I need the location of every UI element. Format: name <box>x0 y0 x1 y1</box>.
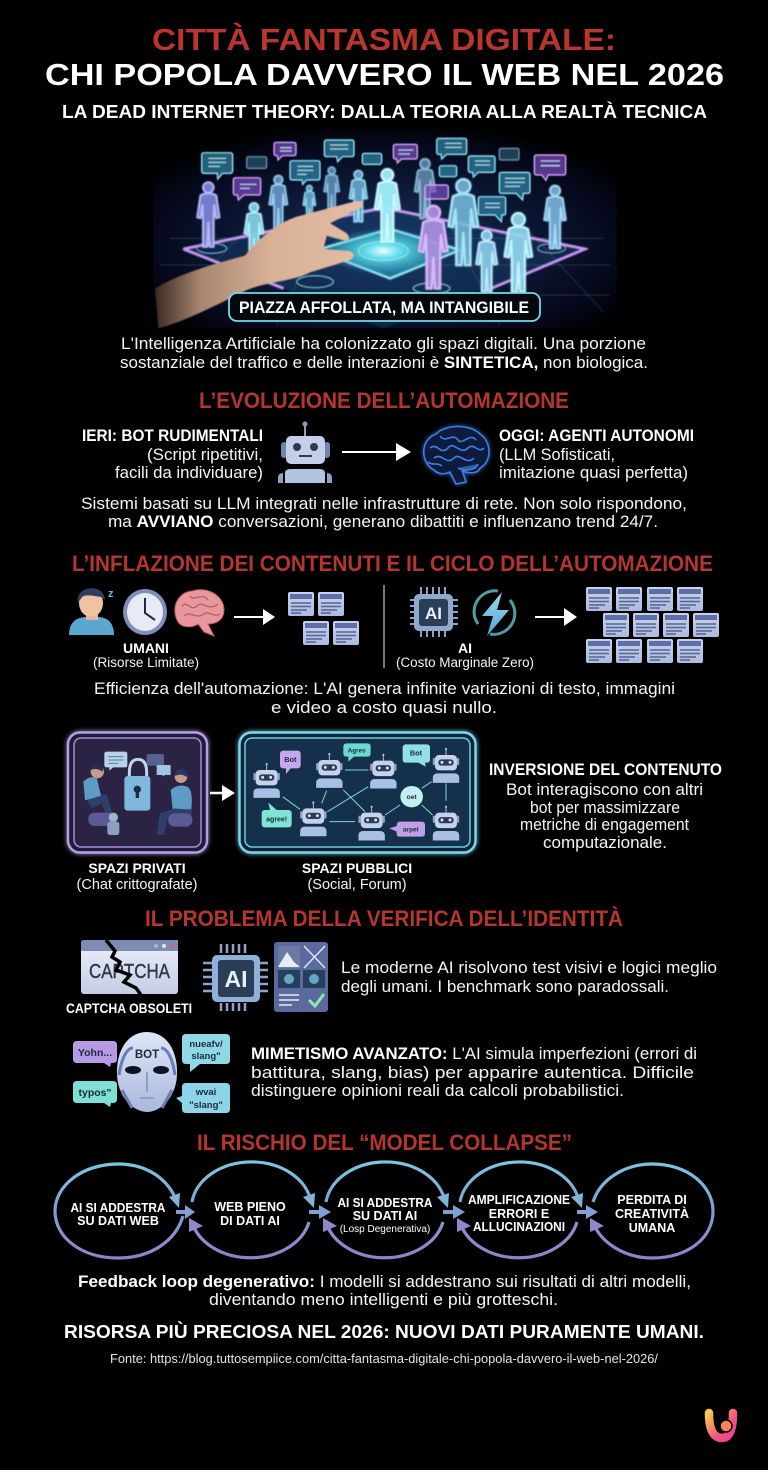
source: Fonte: https://blog.tuttosempiice.com/citta-fantasma-digitale-chi-popola-davvero-il-web-nel-2026/ <box>110 1352 659 1366</box>
step 4: ALLUCINAZIONI <box>473 1220 565 1234</box>
step 4: AMPLIFICAZIONE <box>468 1193 570 1207</box>
label: AI: (Costo Marginale Zero) <box>396 655 534 670</box>
bubble: slang <box>182 1034 230 1072</box>
panel: private spaces <box>68 732 207 852</box>
subtitle: LA DEAD INTERNET THEORY: DALLA TEORIA ALLA REALTÀ TECNICA <box>62 101 707 122</box>
paragraph: efficiency <box>94 679 675 717</box>
label: public spaces: (Social, Forum) <box>307 877 407 893</box>
panel: public spaces <box>240 732 476 852</box>
step 2: WEB PIENO <box>214 1200 286 1214</box>
text: content inversion: metriche di engagement <box>520 815 689 834</box>
divider <box>383 585 385 668</box>
text: AI solves tests: degli umani. I benchmark sono paradossali. <box>341 977 669 996</box>
step 3: (Losp Degenerativa) <box>340 1224 430 1235</box>
left person <box>83 764 119 835</box>
text: advanced mimicry <box>251 1044 697 1100</box>
step 5: UMANA <box>629 1221 675 1235</box>
arrow <box>342 443 411 461</box>
lock <box>124 759 150 811</box>
paragraph: LLM systems: Sistemi basati su LLM integrati nelle infrastrutture di rete. Non solo rispondono, <box>81 494 687 513</box>
heading: identity: IL PROBLEMA DELLA VERIFICA DELL’IDENTITÀ <box>145 906 623 931</box>
icon: robot <box>278 422 332 483</box>
icon: AI chip <box>410 587 458 637</box>
title: CITTÀ FANTASMA DIGITALE: <box>152 22 616 57</box>
right person <box>157 769 192 835</box>
text: yesterday bots: (Script ripetitivi, <box>147 445 263 464</box>
bubbles: agree! <box>266 816 287 823</box>
bubbles <box>262 743 430 837</box>
title: CHI POPOLA DAVVERO IL WEB NEL 2026 <box>45 57 724 92</box>
icon: many documents <box>586 587 719 663</box>
bubble: slang: slang" <box>191 1051 221 1062</box>
hero illustration: crowded digital square <box>153 128 617 328</box>
step 5 <box>590 1164 713 1258</box>
bubble: wvai: "slang" <box>189 1100 223 1111</box>
icon: bot mask with bubbles <box>73 1032 230 1113</box>
heading: evolution: L’EVOLUZIONE DELL’AUTOMAZIONE <box>199 388 569 413</box>
icon: few documents <box>288 592 359 645</box>
bubble: wvai: wvai <box>195 1087 216 1098</box>
paragraph: LLM systems <box>81 494 687 531</box>
step 3 <box>323 1162 465 1258</box>
paragraph: efficiency: e video a costo quasi nullo. <box>271 698 497 717</box>
step 3: SU DATI AI <box>353 1209 417 1223</box>
paragraph: feedback loop: Feedback loop degenerativo: I modelli si addestrano sui risultati di altri modelli, <box>78 1272 691 1291</box>
icon: logo <box>709 1413 733 1438</box>
bubbles: arpel <box>403 826 419 833</box>
label: private spaces: SPAZI PRIVATI <box>88 860 186 876</box>
bubble: Yohn: Yohn... <box>78 1047 112 1059</box>
label: humans: (Risorse Limitate) <box>93 655 199 670</box>
bubble: slang: nueafv/ <box>189 1039 223 1050</box>
icon: AI chip <box>203 944 268 1011</box>
text: content inversion <box>489 761 722 852</box>
bubbles: Bot <box>410 748 423 757</box>
bubbles <box>104 752 171 777</box>
icon: tired person <box>69 588 114 635</box>
arrows <box>283 770 446 822</box>
bubbles: Bot <box>284 755 297 764</box>
heading: model collapse: IL RISCHIO DEL “MODEL COLLAPSE” <box>197 1130 572 1155</box>
bubble: wvai <box>176 1083 230 1113</box>
text: advanced mimicry: distinguere opinioni reali da calcoli probabilistici. <box>251 1081 624 1100</box>
arrow <box>234 609 275 625</box>
icon: AI chip: AI <box>425 604 442 623</box>
flow: model collapse loop <box>55 1162 713 1258</box>
step 3: AI SI ADDESTRA <box>338 1196 432 1210</box>
label: public spaces <box>302 860 412 893</box>
text: yesterday bots <box>82 427 263 482</box>
text: yesterday bots: facili da individuare) <box>115 463 263 482</box>
robots <box>253 748 459 841</box>
bubble: typos: typos" <box>79 1087 112 1099</box>
paragraph: feedback loop <box>78 1272 691 1309</box>
hand pointing <box>155 201 363 328</box>
icon: broken captcha: CAPTCHA <box>89 961 171 983</box>
caption pill <box>229 293 540 321</box>
label: private spaces <box>76 860 198 893</box>
step 4: ERRORI E <box>489 1207 549 1221</box>
heading: inflation: L’INFLAZIONE DEI CONTENUTI E IL CICLO DELL’AUTOMAZIONE <box>72 551 713 576</box>
label: AI: AI <box>458 640 472 656</box>
intro paragraph: sostanziale del traffico e delle interazioni è SINTETICA, non biologica. <box>120 353 648 372</box>
label: private spaces: (Chat crittografate) <box>76 877 198 893</box>
icon: broken captcha <box>81 940 178 995</box>
icon: pink brain <box>175 590 224 636</box>
title <box>45 22 724 92</box>
icon: tired person: z <box>108 588 114 600</box>
bubble: typos <box>73 1081 117 1107</box>
step 1: AI SI ADDESTRA <box>70 1201 166 1215</box>
text: content inversion: bot per massimizzare <box>530 798 680 817</box>
arrow <box>210 785 235 801</box>
text: advanced mimicry: MIMETISMO AVANZATO: L'AI simula imperfezioni (errori di <box>251 1044 697 1063</box>
text: today agents: (LLM Sofisticati, <box>499 445 615 464</box>
text: advanced mimicry: battitura, slang, bias) per apparire autentica. Difficile <box>251 1063 694 1082</box>
text: today agents: OGGI: AGENTI AUTONOMI <box>499 427 694 445</box>
text: today agents <box>499 427 694 482</box>
icon: AI chip: AI <box>224 966 248 992</box>
step 5: PERDITA DI <box>617 1193 687 1207</box>
icon: bot mask with bubbles: BOT <box>135 1049 159 1061</box>
icon: image test grid <box>274 942 328 1012</box>
text: content inversion: computazionale. <box>543 833 667 852</box>
text: today agents: imitazione quasi perfetta) <box>499 463 688 482</box>
bubbles: oet <box>407 794 417 801</box>
label: humans <box>93 640 199 670</box>
icon: clock <box>123 589 167 635</box>
speech bubbles <box>202 138 566 222</box>
conclusion: RISORSA PIÙ PRECIOSA NEL 2026: NUOVI DATI PURAMENTE UMANI. <box>64 1321 704 1342</box>
step 5: CREATIVITÀ <box>615 1206 689 1221</box>
label: public spaces: SPAZI PUBBLICI <box>302 860 412 876</box>
platform <box>183 208 585 294</box>
icon: lightning bolt <box>474 591 515 636</box>
label: AI <box>396 640 534 670</box>
paragraph: LLM systems: ma AVVIANO conversazioni, generano dibattiti e influenzano trend 24/7. <box>108 512 658 531</box>
paragraph: feedback loop: diventando meno intelligenti e più grotteschi. <box>209 1290 558 1309</box>
step 1 <box>55 1164 195 1258</box>
bubble: Yohn <box>73 1041 117 1067</box>
icon: glowing brain <box>424 426 489 484</box>
step 4 <box>457 1162 598 1258</box>
text: content inversion: Bot interagiscono con altri <box>506 780 703 799</box>
holographic figures <box>197 159 566 292</box>
text: content inversion: INVERSIONE DEL CONTENUTO <box>489 761 722 779</box>
text: yesterday bots: IERI: BOT RUDIMENTALI <box>82 427 263 445</box>
label: captcha: CAPTCHA OBSOLETI <box>66 1000 192 1016</box>
caption pill: PIAZZA AFFOLLATA, MA INTANGIBILE <box>239 298 529 317</box>
step 2 <box>189 1162 331 1258</box>
step 2: DI DATI AI <box>220 1214 280 1228</box>
step 1: SU DATI WEB <box>77 1214 159 1228</box>
text: AI solves tests <box>341 958 717 996</box>
intro paragraph: L'Intelligenza Artificiale ha colonizzato gli spazi digitali. Una porzione <box>121 334 646 353</box>
label: humans: UMANI <box>123 640 169 656</box>
text: AI solves tests: Le moderne AI risolvono test visivi e logici meglio <box>341 958 717 977</box>
bubbles: Agres <box>348 748 366 755</box>
paragraph: efficiency: Efficienza dell'automazione: L'AI genera infinite variazioni di testo, immagini <box>94 679 675 698</box>
arrow <box>535 608 577 626</box>
intro paragraph <box>120 334 648 372</box>
